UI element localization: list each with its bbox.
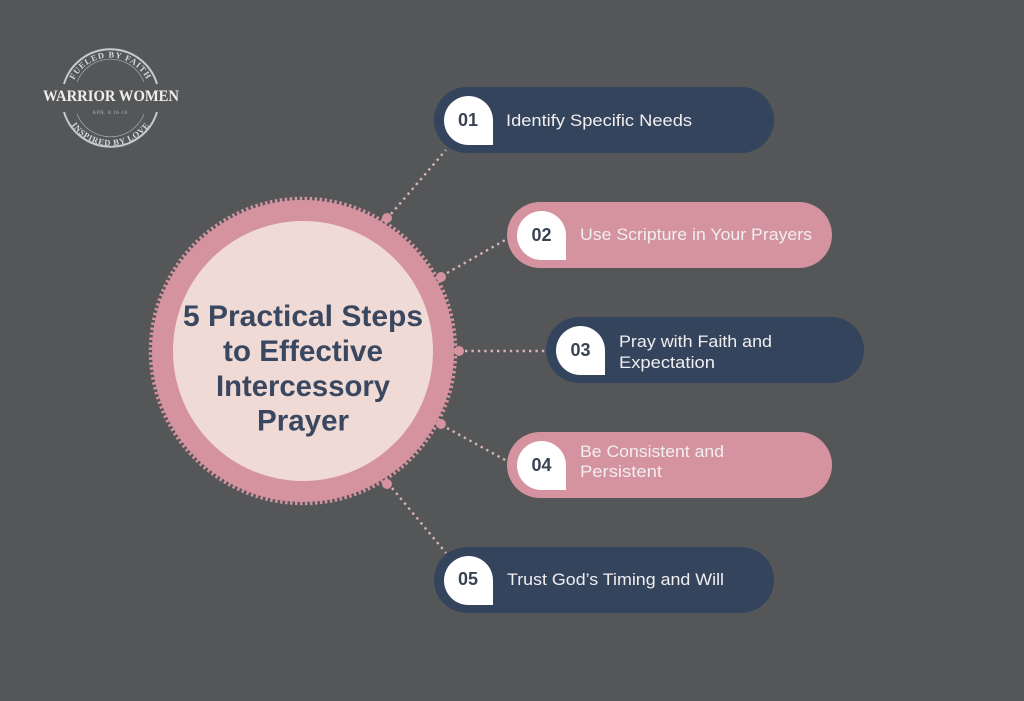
heading: to Effective [223, 335, 383, 368]
step 2 pill [507, 202, 832, 268]
dotted connector: step 5 [392, 488, 446, 553]
heading: 5 Practical Steps [183, 300, 423, 333]
dotted connector: step 4 [447, 428, 507, 461]
step 3 pill [546, 317, 864, 383]
step 1 pill [434, 87, 774, 153]
step 1 pill: 01 [458, 110, 478, 130]
step 2 pill: Use Scripture in Your Prayers [580, 225, 812, 244]
step 3 pill: Expectation [619, 353, 715, 372]
step 4 pill [507, 432, 832, 498]
heading [183, 300, 423, 438]
heading: Prayer [257, 404, 350, 438]
logo: Warrior Women seal: WARRIOR WOMEN [43, 88, 179, 105]
step 3 pill: Pray with Faith and [619, 332, 772, 351]
step 3 pill: 03 [570, 340, 591, 360]
logo: Warrior Women seal [43, 48, 179, 148]
dotted connector: step 1 [391, 150, 446, 214]
step 4 pill: 04 [531, 455, 552, 475]
logo: Warrior Women seal: FUELED BY FAITH [69, 52, 152, 80]
logo: Warrior Women seal: INSPIRED BY LOVE [72, 122, 149, 146]
step 4 pill: Persistent [580, 462, 662, 481]
step 1 pill: Identify Specific Needs [506, 111, 692, 130]
logo: Warrior Women seal: APH. 6:10-18 [92, 111, 128, 116]
step 4 pill: Be Consistent and [580, 442, 724, 461]
step 5 pill: 05 [458, 569, 478, 589]
dotted connector: step 2 [447, 239, 507, 273]
step 2 pill: 02 [531, 225, 552, 245]
dotted connector: step 3 [465, 350, 546, 352]
step 5 pill: Trust God’s Timing and Will [507, 570, 724, 589]
heading: Intercessory [216, 370, 391, 403]
central circle [150, 198, 464, 504]
step 5 pill [434, 547, 774, 613]
connector node dots [382, 213, 464, 489]
